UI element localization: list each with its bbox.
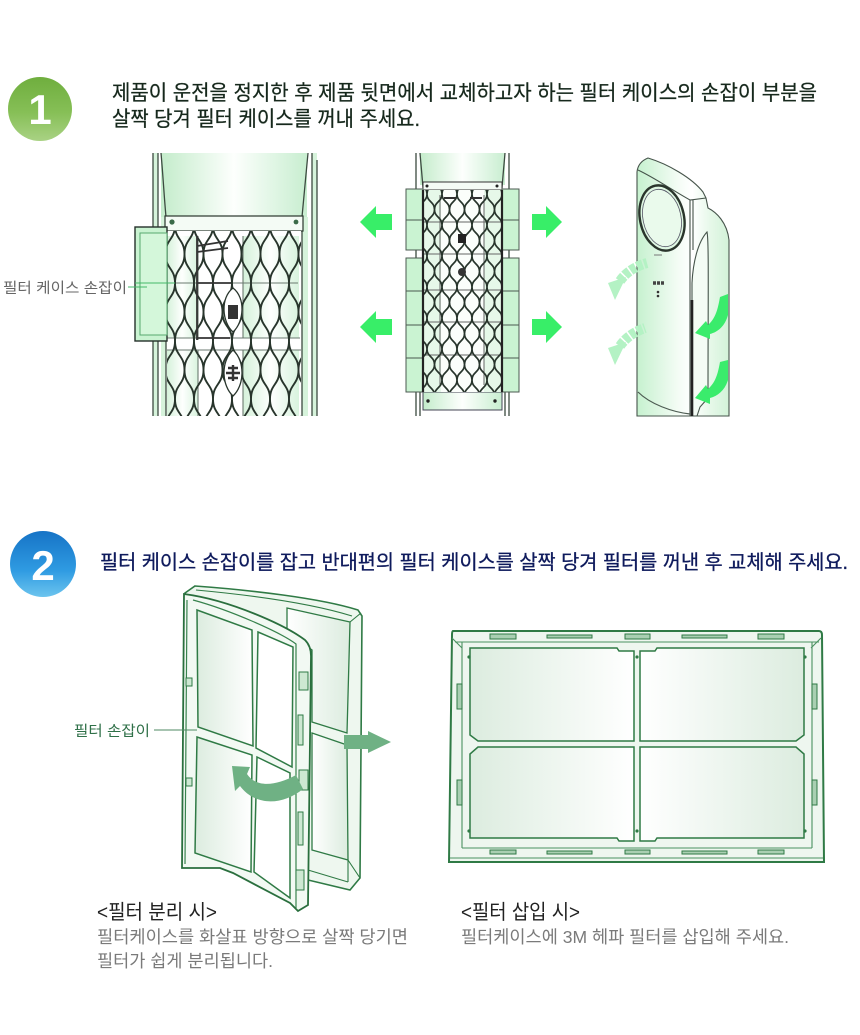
sub-element: top-left filter pane <box>470 648 634 741</box>
heading: step 2 instruction: 필터 케이스 손잡이를 잡고 반대편의 필터 케이스를 살짝 당겨 필터를 꺼낸 후 교체해 주세요. <box>100 551 848 574</box>
diagram: filter case opened <box>182 586 362 911</box>
caption: filter removal: 필터가 쉽게 분리됩니다. <box>97 951 273 971</box>
label: filter handle <box>74 723 197 740</box>
sub-element: bottom-left filter pane <box>470 747 634 841</box>
arrows: pull outward left <box>360 206 392 343</box>
sub-element: right pulled cases <box>502 189 519 392</box>
badge: step 1: 1 <box>28 86 52 133</box>
sub-element: bottom-right filter pane <box>640 747 804 841</box>
badge: step 2: 2 <box>31 542 55 589</box>
sub-element: front door <box>182 594 311 911</box>
arrows: pull outward right <box>532 206 562 343</box>
sub-element: back frame <box>185 586 362 890</box>
arrow: pull direction right <box>344 731 391 753</box>
sub-element: top-right filter pane <box>640 648 804 741</box>
caption: filter insertion <box>461 901 789 947</box>
caption: filter insertion: <필터 삽입 시> <box>461 901 580 924</box>
caption: filter removal: 필터케이스를 화살표 방향으로 살짝 당기면 <box>97 927 408 947</box>
caption: filter removal <box>97 901 408 971</box>
diagram: rear view with both cases pulled out <box>406 153 519 416</box>
arrows: solid curved arrows on product <box>695 294 728 404</box>
label: filter case handle: 필터 케이스 손잡이 <box>3 280 127 297</box>
heading: step 1 instruction: 살짝 당겨 필터 케이스를 꺼내 주세요. <box>112 108 420 131</box>
caption: filter insertion: 필터케이스에 3M 헤파 필터를 삽입해 주세요. <box>461 927 789 947</box>
diagram: filter case front <box>449 631 824 862</box>
label: filter handle: 필터 손잡이 <box>74 723 150 740</box>
caption: filter removal: <필터 분리 시> <box>97 901 217 924</box>
heading: step 1 instruction <box>112 82 817 131</box>
arrow: curved pull <box>232 766 303 801</box>
heading: step 1 instruction: 제품이 운전을 정지한 후 제품 뒷면에서 교체하고자 하는 필터 케이스의 손잡이 부분을 <box>112 82 817 105</box>
sub-element: mesh centre badges <box>224 288 242 396</box>
sub-element: frame clips <box>457 634 817 854</box>
badge: step 1 <box>8 77 72 141</box>
sub-element: left pulled cases <box>406 189 423 392</box>
badge: step 2 <box>10 531 76 597</box>
sub-element: filter case handle <box>135 227 175 341</box>
arrows: fading curved arrows on product <box>608 263 647 365</box>
diagram: product side view <box>634 158 729 416</box>
diagram: rear view with filter case handle <box>135 153 317 416</box>
